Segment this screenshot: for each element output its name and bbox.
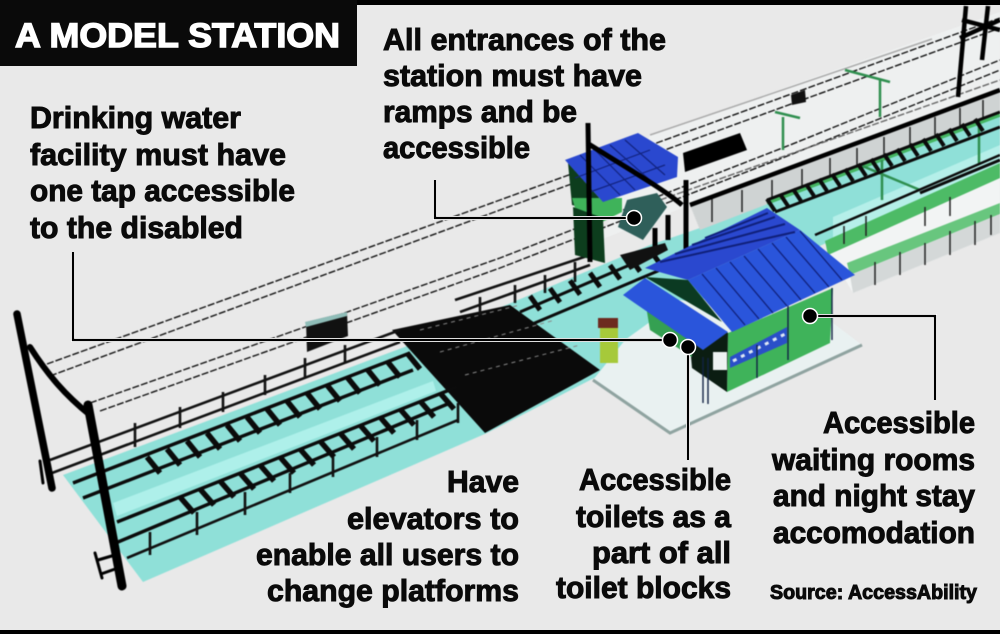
text: toilets: toilets as a (576, 499, 732, 534)
text: elevators: enable all users to (256, 537, 519, 572)
main roof back slope (645, 208, 800, 280)
green poles (775, 70, 979, 200)
text: entrances: ramps and be (383, 94, 577, 129)
text: waiting rooms: waiting rooms (771, 442, 975, 477)
text: waiting rooms: Accessible (823, 405, 975, 440)
source: Source: AccessAbility (770, 582, 978, 604)
text: waiting rooms (771, 405, 976, 550)
text: toilets: Accessible (579, 462, 731, 497)
text: elevators: Have (447, 464, 519, 499)
kiosk (598, 318, 618, 363)
overhead dashed wires (47, 18, 1000, 411)
title (0, 0, 357, 66)
text: drinking water: to the disabled (30, 210, 243, 245)
text: toilets: part of all (592, 535, 731, 570)
main roof front slope (688, 230, 855, 332)
text: waiting rooms: accomodation (773, 515, 975, 550)
lower right platform (825, 163, 1000, 293)
leader line: drinking water (73, 252, 678, 348)
text: elevators: change platforms (267, 573, 519, 608)
small black box (791, 90, 806, 105)
track two (117, 155, 1000, 542)
title: A MODEL STATION (15, 17, 340, 55)
text: drinking water: one tap accessible (30, 173, 295, 208)
teal track bed (63, 112, 1000, 582)
left gantry (17, 314, 122, 586)
leader line: toilets (680, 340, 696, 460)
station gantry (587, 123, 686, 262)
fences (50, 255, 590, 558)
text: toilets: toilet blocks (556, 570, 731, 605)
leader line: entrances (435, 180, 642, 226)
front wing roof (623, 278, 728, 350)
black bar (683, 133, 747, 172)
text: elevators: elevators to (347, 501, 519, 536)
top right gantry (958, 6, 1000, 97)
text: waiting rooms: and night stay (773, 478, 976, 513)
main station building (623, 208, 855, 404)
track one (73, 112, 1000, 498)
text: entrances: station must have (383, 58, 642, 93)
text: entrances: All entrances of the (383, 22, 666, 57)
upper platform surface (600, 12, 1000, 240)
text: drinking water: Drinking water (30, 100, 241, 135)
signal box (305, 312, 348, 352)
small station at rear (565, 133, 678, 263)
text: entrances: accessible (383, 130, 530, 165)
text: entrances (383, 22, 666, 165)
text: drinking water: facility must have (30, 137, 286, 172)
text: drinking water (30, 100, 295, 245)
leader line: waiting rooms (802, 308, 935, 400)
grey platform wall with black edge (690, 90, 1000, 230)
shadow under roof (645, 277, 722, 322)
black bench (620, 243, 668, 270)
level crossing (392, 305, 600, 433)
window band (730, 327, 787, 368)
ramp (618, 193, 667, 240)
text: toilets (556, 462, 732, 605)
main station base (593, 300, 862, 433)
text: elevators (256, 464, 519, 608)
distant grey wire (650, 39, 932, 135)
